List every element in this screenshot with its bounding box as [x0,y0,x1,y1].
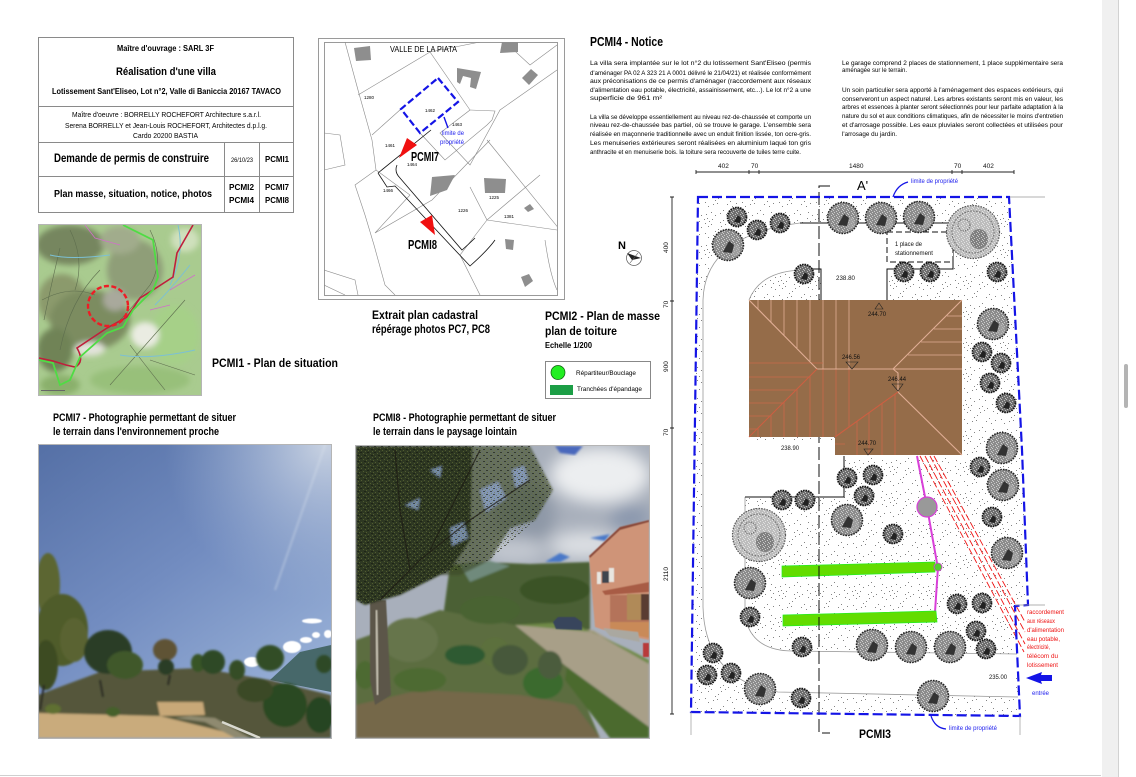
top dimension chain: 402 [983,163,994,170]
top dimension chain: 402 [718,163,729,170]
text block: notice left column: réalisée en maçonnerie traditionnelle avec un enduit finition lissée, ton ocre-gris. [590,131,811,138]
text block: notice left column: Les menuiseries extérieures seront réalisées en aluminium laqué ton gris [590,140,811,147]
text block: notice right column: et d'arrosage possible. Les eaux pluviales seront collectées et utilisées pour [842,122,1064,129]
drainage trench 1 [782,562,935,577]
photo: PCMI8 landscape with house [355,446,650,738]
panel: cadastral plan: PCMI8 [408,237,437,252]
text block: notice right column: nature du sol et aux conditions climatiques, afin de nécessiter le moins d'entretien [842,113,1063,120]
panel: title block table: Cardo 20200 BASTIA [133,131,198,140]
driveway and lawn area [703,223,1018,697]
parking space: 1 place de [895,241,922,248]
red arrow PCMI7 [399,138,417,158]
left dimension chain: 900 [663,361,670,372]
panel: title block table: Plan masse, situation, notice, photos [54,188,212,200]
panel: cadastral plan: VALLE DE LA PIATA [390,45,458,54]
panel: title block table: Lotissement Sant'Eliseo, Lot n°2, Valle di Baniccia 20167 TAVACO [52,87,281,96]
red arrow PCMI8 [420,215,435,235]
boundary extension lines [691,197,1045,735]
heading: PCMI1 plan de situation: PCMI1 - Plan de situation [212,356,338,370]
level labels: 238.80 [836,275,855,282]
arrow: entrée [1026,672,1052,697]
magenta pipe [917,456,938,612]
panel: title block table: PCMI2 [229,182,254,192]
red network connection lines [920,456,1025,652]
callout: limite de propriété top: limite de propriété [911,178,959,185]
callout: raccordement aux réseaux: aux réseaux [1027,618,1056,625]
panel: cadastral plan: 1462 [425,108,436,113]
roof plan [749,300,962,455]
roof plan: 246.44 [888,376,906,383]
caption: PCMI7 [53,412,237,438]
text block: notice right column: conserveront un aspect naturel. Les arbres existants seront mis en valeur, les [842,96,1063,103]
section line [819,186,830,733]
panel: cadastral plan: 1466 [383,188,394,193]
text block: notice left column: superficie de 961 m² [590,95,662,102]
green distributor [934,563,942,571]
roof plan: 246.56 [842,354,860,361]
trees [698,202,1022,712]
photo: PCMI7 terrain and sky [34,444,334,738]
panel: title block table: Réalisation d'une villa [116,66,217,78]
panel: cadastral plan: 1381 [504,214,515,219]
section label A': A' [857,178,868,193]
text block: notice left column: aux préconisations de ce permis d'aménager (raccordement aux réseaux [590,78,812,85]
level labels [781,275,1007,681]
text block: notice right column [842,60,1064,138]
callout: limite de propriété bottom: limite de propriété [949,725,998,732]
level labels: 235.00 [989,674,1007,681]
panel: title block table [38,38,294,212]
caption: PCMI7: PCMI7 - Photographie permettant de situer [53,412,237,424]
text block: notice right column: Un soin particulier sera apporté à l'aménagement des espaces extérieurs, qui [842,87,1063,94]
text block: notice right column: arbres et essences à planter seront sélectionnés pour leur parfaite adaptation à la [842,104,1063,111]
panel: title block table: Serena BORRELLY et Jean-Louis ROCHEFORT, Architectes d.p.l.g. [65,121,267,130]
text block: notice left column: anthracite et en menuiserie bois. la toiture sera recouverte de tuiles terre cuite. [590,149,801,156]
property boundary [691,197,1028,716]
heading: PCMI2 plan de masse: Echelle 1/200 [545,341,593,350]
caption: PCMI7: le terrain dans l'environnement proche [53,426,219,438]
callout: raccordement aux réseaux: d'alimentation [1027,627,1064,634]
icon: north compass: N [618,240,626,252]
left dimension chain: 70 [663,300,670,308]
panel: cadastral plan: 1461 [385,143,396,148]
panel: cadastral plan: limite de [442,130,464,137]
callout: raccordement aux réseaux: télécom du [1027,653,1058,660]
caption: extrait plan cadastral: répérage photos PC7, PC8 [372,322,490,336]
left dimension chain: 400 [663,242,670,253]
panel: cadastral plan: PCMI7 [411,149,439,164]
panel: title block table: PCMI8 [265,195,289,205]
text block: notice left column [590,59,812,156]
panel: cadastral plan: 1225 [489,195,500,200]
callout: limite de propriété top [893,178,959,197]
heading: PCMI2 plan de masse [545,309,660,350]
top dimension chain: 70 [751,163,759,170]
parking space [887,232,953,262]
legend: Tranchées d'épandage [577,386,642,393]
text block: notice left column: niveau rez-de-chaussée bas partiel, où se trouve le garage. L'ensemble sera [590,122,811,129]
heading: PCMI4 notice: PCMI4 - Notice [590,35,663,49]
text block: notice right column: Le garage comprend 2 places de stationnement, 1 place supplémentaire sera [842,60,1063,67]
cadastral parcels and buildings [324,41,560,295]
callout: raccordement aux réseaux: raccordement [1027,609,1064,616]
site plan: plan de masse [663,163,1064,741]
left dimension chain [663,197,674,714]
text block: notice right column: aménagée sur le terrain. [842,67,907,74]
callout: raccordement aux réseaux: lotissement [1027,662,1058,669]
panel: cadastral plan: 1464 [407,162,418,167]
roof plan: 244.70 [868,311,886,318]
caption: PCMI8 [373,412,557,438]
icon: north compass [618,240,642,266]
top dimension chain: 70 [954,163,962,170]
panel: title block table: PCMI4 [229,195,254,205]
left dimension chain: 2110 [663,567,670,581]
callout: limite de propriété bottom [931,716,998,732]
parking space: stationnement [895,250,933,257]
panel: cadastral plan: propriété [440,139,464,146]
text block: notice right column: l'arrosage du jardin. [842,131,897,138]
panel: title block table: Demande de permis de construire [54,153,209,165]
panel: cadastral plan [318,38,564,300]
caption: PCMI8: le terrain dans le paysage lointain [373,426,517,438]
caption: PCMI8: PCMI8 - Photographie permettant de situer [373,412,557,424]
callout: raccordement aux réseaux [1027,609,1064,669]
panel: cadastral plan: 1280 [364,95,375,100]
panel: title block table: Maître d'ouvrage : SARL 3F [117,44,214,53]
legend: Répartiteur/Bouclage [576,370,636,377]
arrow: entrée: entrée [1032,690,1049,697]
text block: notice left column: La villa se développe essentiellement au niveau rez-de-chaussée et comporte un [590,114,811,121]
level labels: 238.90 [781,445,799,452]
callout: raccordement aux réseaux: eau potable, [1027,636,1060,643]
panel: title block table: PCMI1 [265,154,289,164]
roof plan: 244.70 [858,440,876,447]
drainage trench 2 [783,611,937,626]
panel: situation map [36,224,202,396]
caption: extrait plan cadastral [372,308,490,336]
property limit dashed outline [401,78,458,133]
panel: title block table: PCMI7 [265,182,289,192]
text block: notice left column: d'alimentation eau potable, électricité, assainissement, etc...). Le lot n°2 a une [590,86,811,94]
left dimension chain: 70 [663,428,670,436]
text block: notice left column: d'aménager PA 02 A 323 21 A 0001 délivré le 21/04/21) et réalisée conformément [590,70,811,77]
panel: title block table: 26/10/23 [231,158,254,164]
panel: cadastral plan: 1463 [452,122,463,127]
garden stipple [691,197,1028,716]
top dimension chain: 1480 [849,163,864,170]
legend [546,362,650,398]
heading: PCMI2 plan de masse: PCMI2 - Plan de masse [545,309,660,323]
caption: extrait plan cadastral: Extrait plan cadastral [372,308,478,322]
panel: cadastral plan: 1226 [458,208,469,213]
section label PCMI3: PCMI3 [859,727,891,741]
panel: title block table: Maître d'oeuvre : BORRELLY ROCHEFORT Architecture s.a.r.l. [72,110,261,119]
distribution manhole [917,497,937,517]
top dimension chain [696,163,1014,174]
callout: raccordement aux réseaux: électricité, [1027,644,1050,651]
text block: notice left column: La villa sera implantée sur le lot n°2 du lotissement Sant'Eliseo (permis [590,59,811,67]
heading: PCMI2 plan de masse: plan de toiture [545,324,617,338]
